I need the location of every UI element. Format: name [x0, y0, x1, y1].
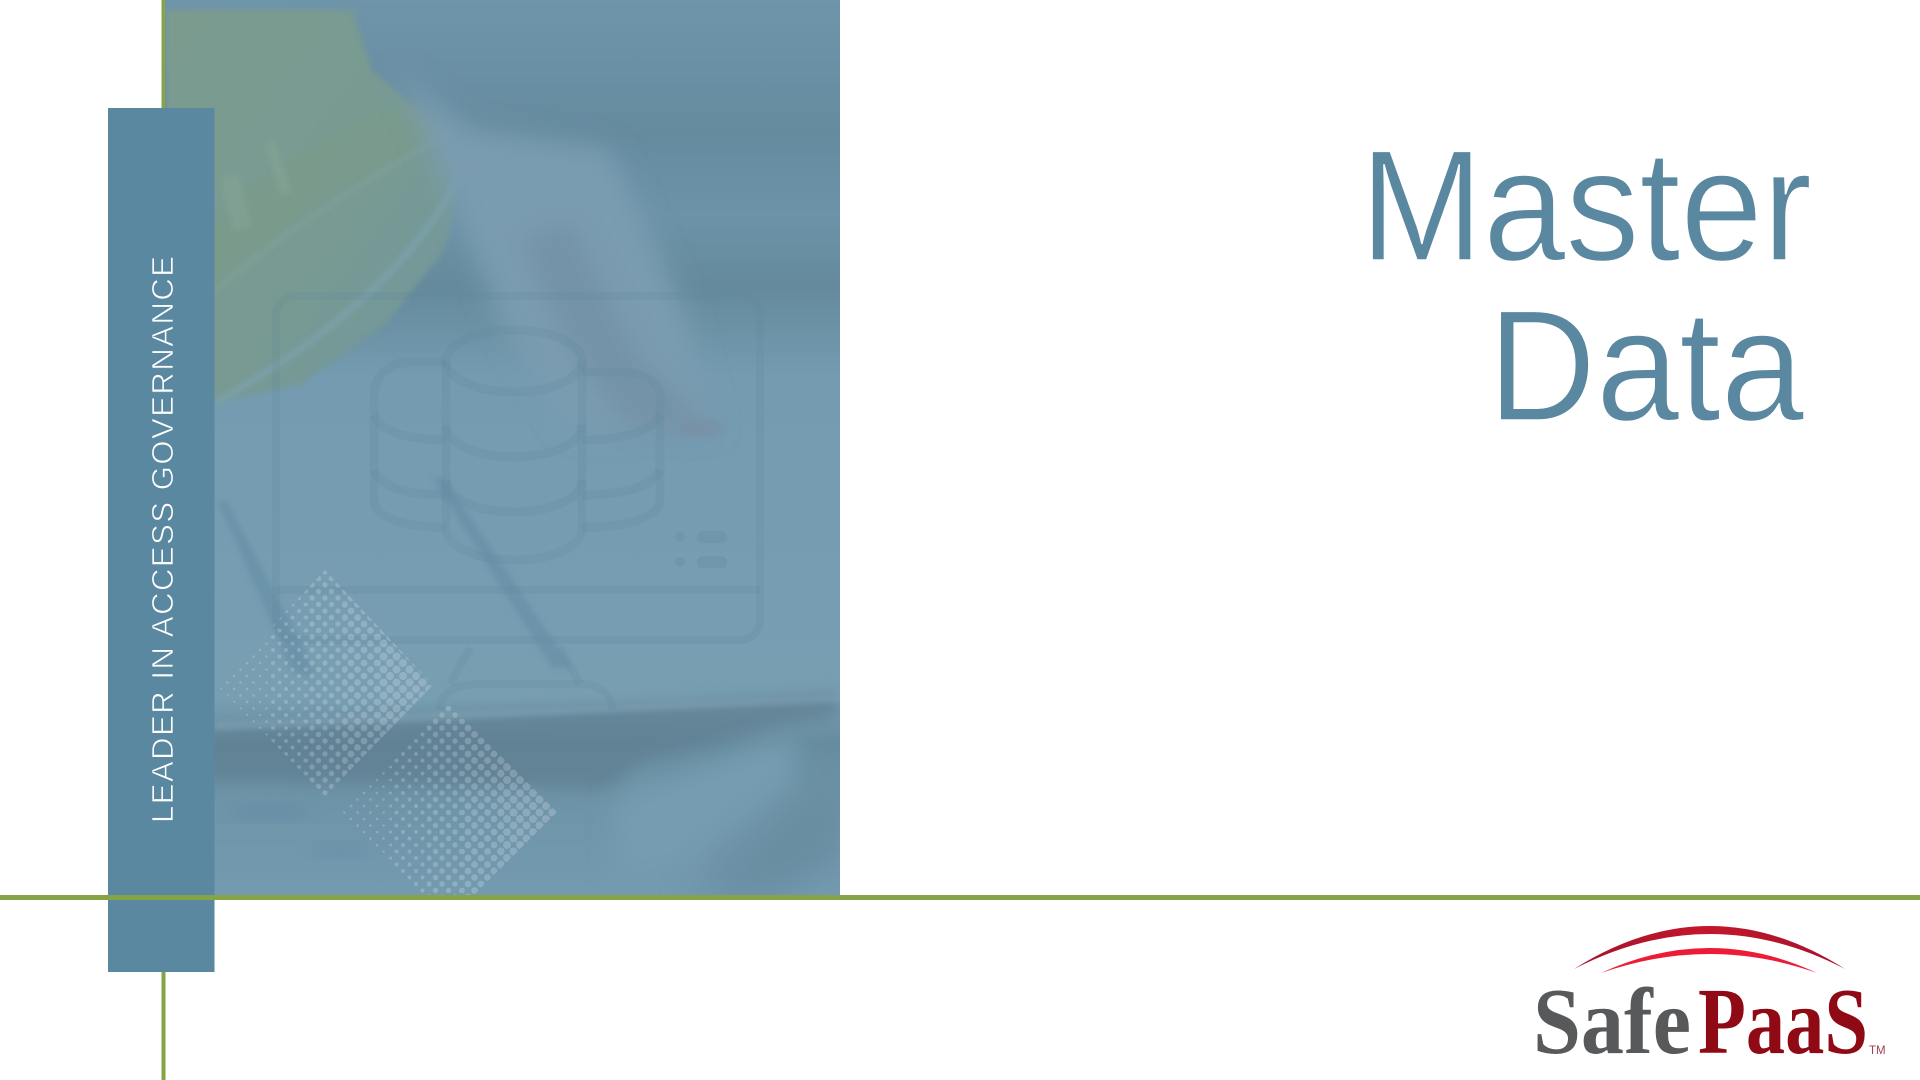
logo wordmark: Safe — [1533, 970, 1691, 1074]
vertical label bar — [108, 108, 214, 972]
vertical green rule — [162, 0, 166, 1080]
photo: green tablet area — [166, 10, 465, 420]
halftone diamond 1 — [217, 570, 433, 796]
horizontal green rule — [0, 895, 1920, 900]
icon: monitor outline — [276, 586, 760, 686]
trademark: TM — [1869, 1045, 1886, 1057]
photo base tone — [165, 0, 840, 895]
title line 1: Master — [1360, 118, 1812, 294]
title line 2: Data — [1488, 278, 1804, 454]
logo wordmark — [1533, 970, 1868, 1074]
tagline: LEADER IN ACCESS GOVERNANCE — [145, 256, 180, 823]
logo: SafePaaS — [1533, 926, 1886, 1074]
logo wordmark: PaaS — [1698, 970, 1868, 1074]
photo: pen streaks — [218, 478, 572, 680]
title — [1360, 118, 1812, 454]
photo: blurred hand — [402, 94, 719, 436]
halftone diamond 2 — [343, 706, 556, 895]
panel: blurred photo with database icon overlay — [165, 0, 840, 922]
photo: desk bands — [166, 695, 840, 896]
logo arcs — [1574, 926, 1845, 973]
icon: database cylinders — [370, 361, 664, 532]
icon: monitor status dots — [675, 531, 727, 568]
